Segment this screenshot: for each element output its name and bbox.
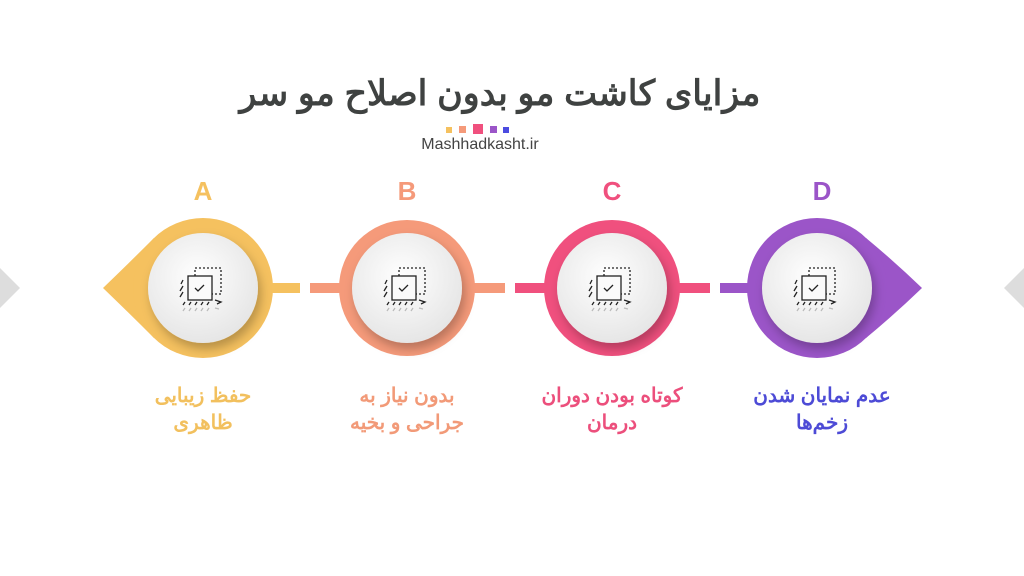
node B	[339, 220, 475, 356]
label D: زخم‌ها	[796, 412, 848, 434]
logo text: Mashhadkasht.ir	[421, 136, 539, 153]
label B	[350, 385, 464, 434]
connectors	[265, 283, 300, 293]
label A	[155, 385, 251, 434]
timeline graphic: B	[398, 176, 416, 206]
label C: درمان	[587, 412, 637, 434]
timeline graphic: C	[603, 176, 622, 206]
label A: ظاهری	[173, 412, 233, 434]
title: مزایای کاشت مو بدون اصلاح مو سر	[240, 74, 760, 113]
node A	[103, 218, 273, 358]
letters: A	[194, 176, 213, 206]
label C	[541, 385, 683, 434]
label C: کوتاه بودن دوران	[541, 385, 683, 407]
label B: بدون نیاز به	[359, 385, 455, 407]
edge arrows	[0, 268, 20, 308]
timeline graphic: D	[813, 176, 831, 206]
label D: عدم نمایان شدن	[753, 385, 891, 407]
node D	[747, 218, 922, 358]
label D	[753, 385, 891, 434]
logo: color squares	[446, 124, 509, 134]
label A: حفظ زیبایی	[155, 385, 251, 407]
label B: جراحی و بخیه	[350, 412, 464, 434]
node C	[544, 220, 680, 356]
